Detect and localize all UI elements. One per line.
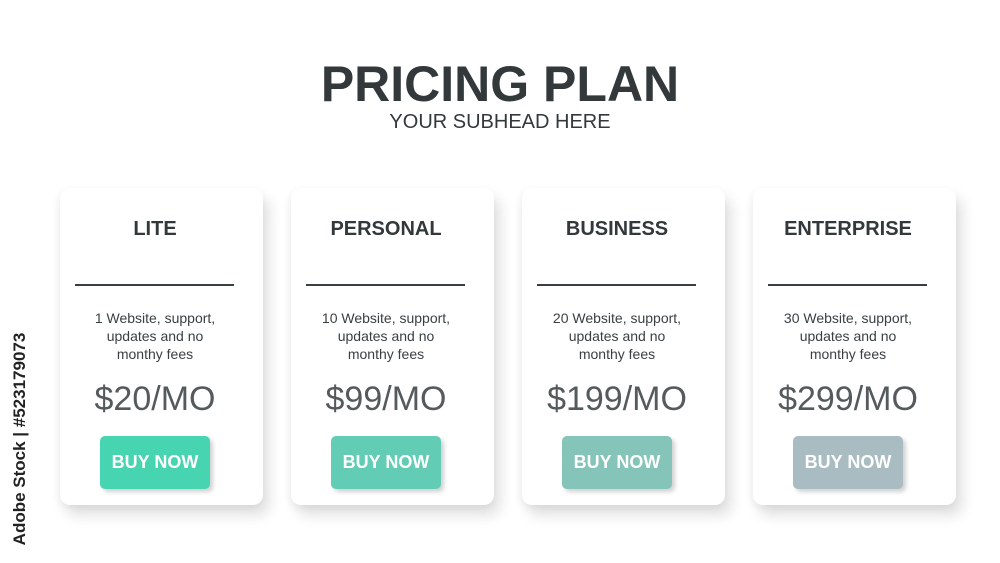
- text: lite description: [95, 310, 215, 362]
- text: enterprise description: monthy fees: [810, 346, 886, 362]
- button: personal: [331, 436, 441, 489]
- button: business: [562, 436, 672, 489]
- text: personal description: monthy fees: [348, 346, 424, 362]
- text: personal description: updates and no: [338, 328, 434, 344]
- heading: business: BUSINESS: [566, 218, 668, 240]
- text: personal description: 10 Website, support,: [322, 310, 450, 326]
- panel: business: [522, 188, 725, 505]
- text: enterprise description: [784, 310, 912, 362]
- watermark text: Adobe Stock | #523179073: [10, 333, 29, 545]
- button: lite: BUY NOW: [112, 452, 198, 472]
- heading: lite: LITE: [133, 218, 177, 240]
- heading: enterprise: ENTERPRISE: [784, 218, 912, 240]
- heading: personal: PERSONAL: [330, 218, 442, 240]
- button: business: BUY NOW: [574, 452, 660, 472]
- text: lite description: updates and no: [107, 328, 203, 344]
- text: business description: updates and no: [569, 328, 665, 344]
- button: enterprise: [793, 436, 903, 489]
- price: personal: $99/MO: [326, 380, 446, 418]
- panel: enterprise: [753, 188, 956, 505]
- text: enterprise description: updates and no: [800, 328, 896, 344]
- text: enterprise description: 30 Website, support,: [784, 310, 912, 326]
- title: PRICING PLAN: [321, 56, 679, 112]
- text: business description: 20 Website, support,: [553, 310, 681, 326]
- price: lite: $20/MO: [95, 380, 215, 418]
- text: lite description: monthy fees: [117, 346, 193, 362]
- button: personal: BUY NOW: [343, 452, 429, 472]
- panel: personal: [291, 188, 494, 505]
- subtitle: YOUR SUBHEAD HERE: [389, 111, 611, 133]
- button: enterprise: BUY NOW: [805, 452, 891, 472]
- text: lite description: 1 Website, support,: [95, 310, 215, 326]
- price: enterprise: $299/MO: [778, 380, 918, 418]
- text: business description: monthy fees: [579, 346, 655, 362]
- panel: lite: [60, 188, 263, 505]
- button: lite: [100, 436, 210, 489]
- price: business: $199/MO: [547, 380, 687, 418]
- text: business description: [553, 310, 681, 362]
- text: personal description: [322, 310, 450, 362]
